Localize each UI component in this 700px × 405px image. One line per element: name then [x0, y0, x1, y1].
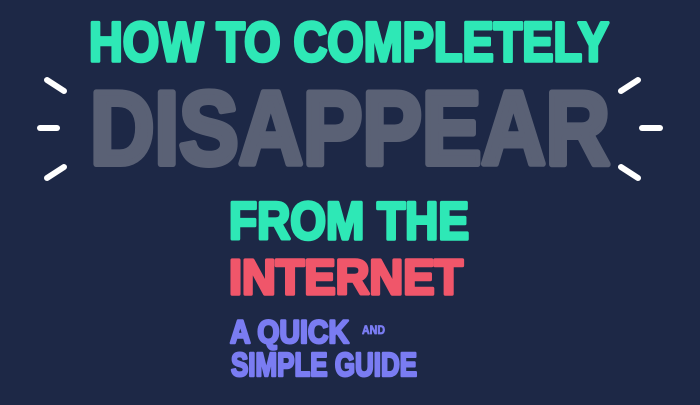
icon: left burst lines — [40, 80, 64, 178]
heading: how to completely: HOW TO COMPLETELY — [89, 10, 609, 73]
subtitle: a quick and simple guide: A QUICK — [230, 314, 349, 350]
subtitle: a quick and simple guide: AND — [362, 323, 385, 337]
subtitle: a quick and simple guide: SIMPLE GUIDE — [231, 346, 417, 383]
icon: right burst lines — [621, 80, 660, 178]
subtitle: a quick and simple guide — [230, 314, 417, 383]
heading: internet: INTERNET — [229, 251, 463, 305]
heading: from the: FROM THE — [229, 192, 469, 251]
heading: disappear: DISAPPEAR — [90, 71, 610, 187]
